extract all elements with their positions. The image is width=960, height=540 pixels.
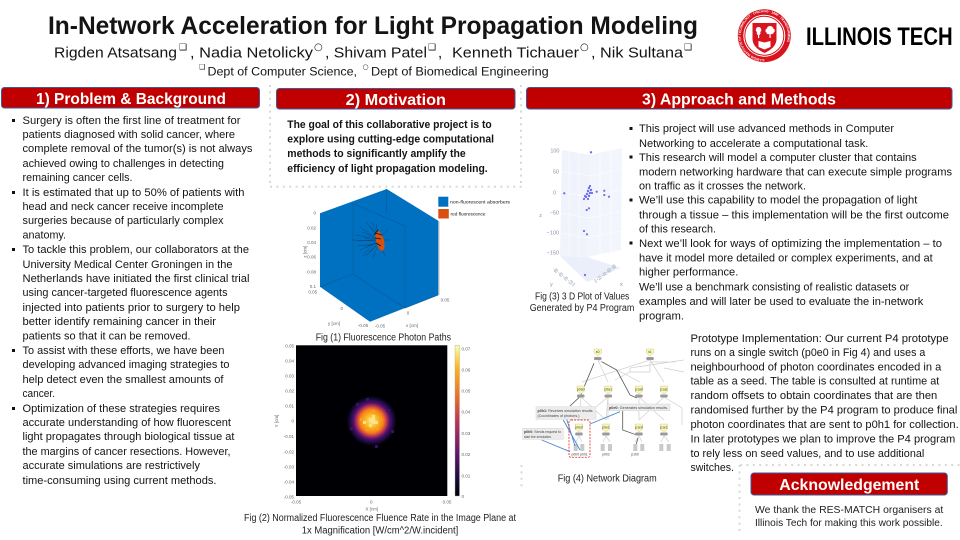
authors: ○: [580, 42, 589, 53]
axis labels: y [cm]: [328, 321, 340, 326]
bullet list: background text: Optimization of these strategies requires: [22, 403, 220, 415]
text: acknowledgement: We thank the RES-MATCH organisers at: [755, 505, 944, 516]
axis labels: -0.01: [284, 434, 294, 439]
colorbar: 0.06: [462, 368, 471, 372]
axis labels: 0: [407, 310, 410, 316]
node labels: p0a1: [605, 388, 612, 392]
colorbar: 0: [462, 494, 464, 499]
axis labels: 0: [291, 418, 294, 424]
bullet list: background text: surgeries because of particularly complex: [22, 215, 224, 227]
photon paths burst: [352, 222, 390, 258]
axis labels: x: [620, 282, 623, 288]
affiliations: Dept of Computer Science,: [208, 66, 357, 78]
callout: p0h1: [536, 407, 596, 419]
panel: problem and background: [2, 88, 260, 487]
text: motivation goal: methods to significantly amplify the: [287, 148, 466, 160]
node labels: p1a1: [660, 388, 668, 392]
callout: p0e0: [607, 404, 670, 411]
axis labels: x [cm]: [406, 323, 418, 328]
callout: p0h1: (Coordinates of photons.): [538, 414, 580, 418]
node labels: p1h0: [631, 452, 639, 456]
text: acknowledgement: Illinois Tech for making this work possible.: [755, 518, 943, 529]
bullet list: approach text: We’ll use this capability to model the propagation of light: [639, 195, 917, 207]
authors: ,: [438, 44, 442, 62]
title: In-Network Acceleration for Light Propagation Modeling: [48, 12, 698, 40]
axis labels: 0.02: [285, 388, 294, 394]
bullet list: approach text: We’ll use a benchmark consisting of realistic datasets or: [639, 282, 910, 294]
axis labels: -0.05: [358, 323, 369, 328]
text: prototype implementation: switches.: [690, 462, 734, 474]
plot walls: [560, 148, 622, 282]
heading: problem and background: [2, 88, 260, 108]
bullet list: background text: anatomy.: [22, 230, 66, 242]
axis labels: −100: [547, 230, 559, 236]
bullet list: background text: It is estimated that up to 50% of patients with: [22, 187, 244, 199]
axis labels: 0.02: [307, 226, 316, 230]
axis labels: [539, 149, 623, 288]
text: prototype implementation: random offsets to obtain coordinates that are then: [690, 390, 937, 402]
text: prototype implementation: Prototype Implementation: Our current P4 prototype: [690, 333, 949, 345]
bullet list: background text: accurate simulations are restrictively: [22, 460, 200, 472]
callout: p0h0: [523, 428, 563, 439]
axis labels: 0.03: [285, 374, 294, 378]
node labels: p0h2: [602, 452, 610, 456]
axis labels: z: [539, 213, 542, 219]
axis labels: 0.01: [285, 404, 294, 408]
logo: Illinois Tech: ILLINOIS INSTITUTE OF TECHNOLOGY · CHICAGO · 1890 · TRANSFORMING: [738, 10, 790, 62]
authors: ❑: [428, 43, 436, 53]
axis labels: [274, 344, 452, 512]
bullet list: background text: head and neck cancer receive incomplete: [22, 201, 224, 213]
caption: figure 3: Generated by P4 Program: [530, 303, 634, 314]
affiliations: ○: [362, 63, 369, 71]
legend: [438, 197, 511, 218]
text: prototype implementation: photon coordinates that are sent to p0h1 for collection.: [690, 419, 959, 431]
bullet list: approach text: Next we’ll look for ways of optimizing the implementation – to: [639, 238, 942, 250]
axis labels: 0.1: [310, 284, 316, 289]
chart: fluorescence photon paths: [302, 189, 511, 328]
caption: figure 2: Fig (2) Normalized Fluorescence Fluence Rate in the Image Plane at: [244, 513, 516, 524]
heading: motivation: [276, 88, 515, 109]
bullet list: background text: cancer.: [22, 388, 55, 400]
bullet list: approach text: on traffic as it crosses the network.: [639, 181, 806, 193]
colorbar: 0.07: [462, 346, 471, 352]
bullet list: background text: remaining cancer cells.: [22, 172, 132, 184]
bullet list: approach text: modern networking hardware that can execute simple programs: [639, 166, 952, 178]
colorbar: 0.03: [462, 431, 471, 436]
authors: , Nadia Netolicky: [190, 44, 314, 62]
text: motivation goal: efficiency of light propagation modeling.: [287, 163, 488, 175]
text: acknowledgement: [755, 505, 944, 529]
axis labels: 0.05: [308, 290, 318, 294]
axis labels: 0: [370, 500, 373, 504]
bullet list: background text: accurate understanding of how fluorescent: [22, 417, 231, 429]
node labels: p0a0: [577, 388, 585, 392]
axis labels: 100: [550, 149, 560, 155]
colorbar: 0.04: [462, 410, 471, 414]
diagram: network topology: [523, 349, 684, 457]
caption: figure 3: [530, 292, 634, 314]
chart: 3D plot of values: [539, 148, 623, 288]
heading: problem and background: 1) Problem & Background: [36, 91, 226, 108]
node labels: p0e0: [575, 426, 583, 430]
legend: red fluorescence: [450, 212, 486, 218]
bullet list: background text: Netherlands have initiated the first clinical trial: [22, 273, 250, 285]
panel: acknowledgement: [751, 473, 947, 529]
bullet list: approach text: Networking to accelerate a computational task.: [639, 138, 868, 150]
axis labels: -0.05: [375, 324, 386, 328]
callout: p0h1: p0h1: Receives simulation results.: [538, 409, 594, 413]
bullet list: background text: To tackle this problem, our collaborators at the: [22, 244, 249, 256]
bullet list: background text: [12, 115, 253, 487]
caption: figure 4: Fig (4) Network Diagram: [558, 474, 657, 484]
bullet list: background text: using cancer-targeted fluorescence agents: [22, 287, 228, 299]
axis labels: 50: [553, 170, 559, 176]
bullet list: background text: achieved owing to challenges in detecting: [22, 158, 224, 170]
node labels: p0h0 p0h1: [571, 452, 588, 456]
axis labels: -0.05: [284, 494, 294, 500]
axis labels: 0 −20 −40 −60 −80: [594, 264, 618, 285]
logo: Illinois Tech: [738, 9, 953, 62]
axis labels: −80 −60 −40 −20 0: [551, 267, 576, 288]
heading: approach and methods: [526, 88, 952, 109]
axis labels: 0.05: [443, 500, 452, 504]
authors: [54, 42, 692, 62]
colorbar: [455, 345, 471, 499]
bullet list: background text: patients so that it can be removed.: [22, 330, 190, 342]
authors: ❑: [684, 43, 692, 53]
active dark paths: [570, 362, 638, 445]
axis labels: -0.03: [284, 464, 294, 470]
heading: acknowledgement: [751, 473, 947, 495]
text: prototype implementation: randomised further by the P4 program to produce final: [690, 405, 957, 417]
bullet list: background text: time-consuming using current methods.: [22, 475, 217, 487]
text: motivation goal: explore using cutting-edge computational: [287, 134, 494, 146]
node labels: s0: [596, 350, 600, 354]
node labels: [571, 350, 668, 456]
axis labels: X [cm]: [365, 506, 378, 512]
axis labels: 0.06: [307, 254, 316, 260]
axis labels: -0.02: [284, 450, 294, 454]
axis labels: 0: [340, 306, 343, 311]
text: prototype implementation: In later prototypes we plan to improve the P4 program: [690, 434, 955, 446]
panel: approach and methods: [523, 88, 959, 484]
text: prototype implementation: neighbourhood of photon coordinates encoded in a: [690, 362, 942, 374]
node labels: p1e0: [635, 426, 643, 430]
bullet list: background text: the margins of cancer resections. However,: [22, 446, 230, 458]
bullet list: background text: complete removal of the tumor(s) is not always: [22, 143, 253, 155]
authors: Kenneth Tichauer: [452, 44, 579, 62]
colorbar: 0.02: [462, 452, 471, 457]
bullet list: approach text: of this research.: [639, 224, 716, 236]
blue callout leaders: [542, 412, 620, 452]
bullet list: background text: light propagates through biological tissue at: [22, 431, 234, 443]
axis labels: z [cm]: [302, 246, 308, 258]
heading: motivation: 2) Motivation: [346, 92, 446, 109]
axis labels: y: [550, 282, 553, 288]
text: prototype implementation: to rely less on seed values, and to use additional: [690, 448, 924, 460]
text: motivation goal: The goal of this collaborative project is to: [287, 119, 492, 131]
authors: Rigden Atsatsang: [54, 44, 177, 62]
axis labels: 0.04: [285, 358, 294, 364]
authors: , Nik Sultana: [591, 44, 684, 62]
switch nodes: [575, 349, 668, 432]
bullet list: background text: patients diagnosed with solid cancer, where: [22, 129, 235, 141]
bullet list: background text: better identify remaining cancer in their: [22, 316, 216, 328]
node labels: s1: [648, 350, 652, 354]
host machines: [574, 444, 671, 451]
colorbar: 0.05: [462, 388, 471, 394]
authors: , Shivam Patel: [325, 44, 427, 62]
text: motivation goal: [287, 119, 494, 175]
authors: ❑: [179, 43, 187, 53]
bullet list: background text: Surgery is often the first line of treatment for: [22, 115, 241, 127]
axis labels: 0.04: [307, 240, 316, 245]
axis labels: [302, 210, 450, 328]
caption: figure 2: 1x Magnification [W/cm^2/W.incident]: [302, 526, 459, 536]
legend: non-fluorescent absorbers: [450, 200, 511, 206]
affiliations: Dept of Biomedical Engineering: [371, 66, 549, 78]
chart: fluorescence fluence heatmap: [274, 344, 471, 512]
bullet list: approach text: [630, 123, 952, 322]
axis labels: 0: [313, 210, 316, 216]
caption: figure 2: [244, 513, 516, 536]
axis labels: 0: [553, 191, 556, 197]
3D tissue cube: [320, 189, 439, 322]
red dashed highlight: [569, 420, 590, 457]
heatmap image: [296, 345, 447, 496]
bullet list: approach text: examples and will later be used to evaluate the in-network: [639, 296, 924, 308]
affiliations: [199, 63, 549, 78]
bullet list: background text: To assist with these efforts, we have been: [22, 345, 224, 357]
data points: [563, 151, 610, 276]
heading: approach and methods: 3) Approach and Methods: [642, 92, 836, 108]
axis labels: 0.08: [307, 270, 316, 274]
callout: p0h0: p0h0: Sends request to: [524, 430, 561, 434]
text: prototype implementation: runs on a single switch (p0e0 in Fig 4) and uses a: [690, 347, 926, 359]
bullet list: approach text: higher performance.: [639, 267, 738, 279]
bullet list: approach text: This project will use advanced methods in Computer: [639, 123, 894, 135]
bullet list: approach text: program.: [639, 310, 684, 322]
bullet list: approach text: through a tissue – this implementation will be the first outcome: [639, 210, 949, 222]
colorbar: 0.01: [462, 474, 471, 478]
topology links: [576, 360, 684, 442]
bullet list: background text: developing advanced imaging strategies to: [22, 359, 230, 371]
node labels: p1a0: [635, 388, 643, 392]
authors: ○: [314, 42, 323, 53]
bullet list: background text: injected into patients prior to surgery to help: [22, 302, 240, 314]
bullet list: approach text: This research will model a computer cluster that contains: [639, 152, 917, 164]
bullet list: background text: help detect even the smallest amounts of: [22, 374, 224, 386]
bullet list: background text: University Medical Center Groningen in the: [22, 259, 232, 271]
text: prototype implementation: [690, 333, 959, 474]
callout: p0h0: start the simulation.: [524, 435, 552, 439]
text: prototype implementation: table as a seed. The table is consulted at runtime at: [690, 376, 939, 388]
router boxes: [575, 357, 668, 436]
dotted panel dividers: [270, 85, 960, 532]
axis labels: −150: [547, 251, 559, 257]
axis labels: -0.05: [291, 500, 302, 504]
bullet list: approach text: have it model more detailed or complex experiments, and at: [639, 252, 933, 264]
panel: motivation: [276, 88, 515, 175]
axis labels: −50: [550, 211, 559, 217]
caption: figure 3: Fig (3) 3 D Plot of Values: [535, 292, 629, 302]
axis labels: 0.05: [441, 298, 450, 302]
node labels: p1e1: [660, 426, 668, 430]
callout: p0e0: p0e0: Generates simulation results.: [609, 406, 668, 410]
axis labels: 0.05: [285, 344, 294, 348]
heading: acknowledgement: Acknowledgement: [779, 477, 919, 494]
affiliations: ❑: [199, 63, 205, 71]
axis labels: -0.04: [284, 480, 294, 484]
axis labels: Y [cm]: [274, 415, 279, 427]
node labels: p0e1: [602, 426, 610, 430]
caption: figure 1: Fig (1) Fluorescence Photon Paths: [316, 332, 451, 344]
